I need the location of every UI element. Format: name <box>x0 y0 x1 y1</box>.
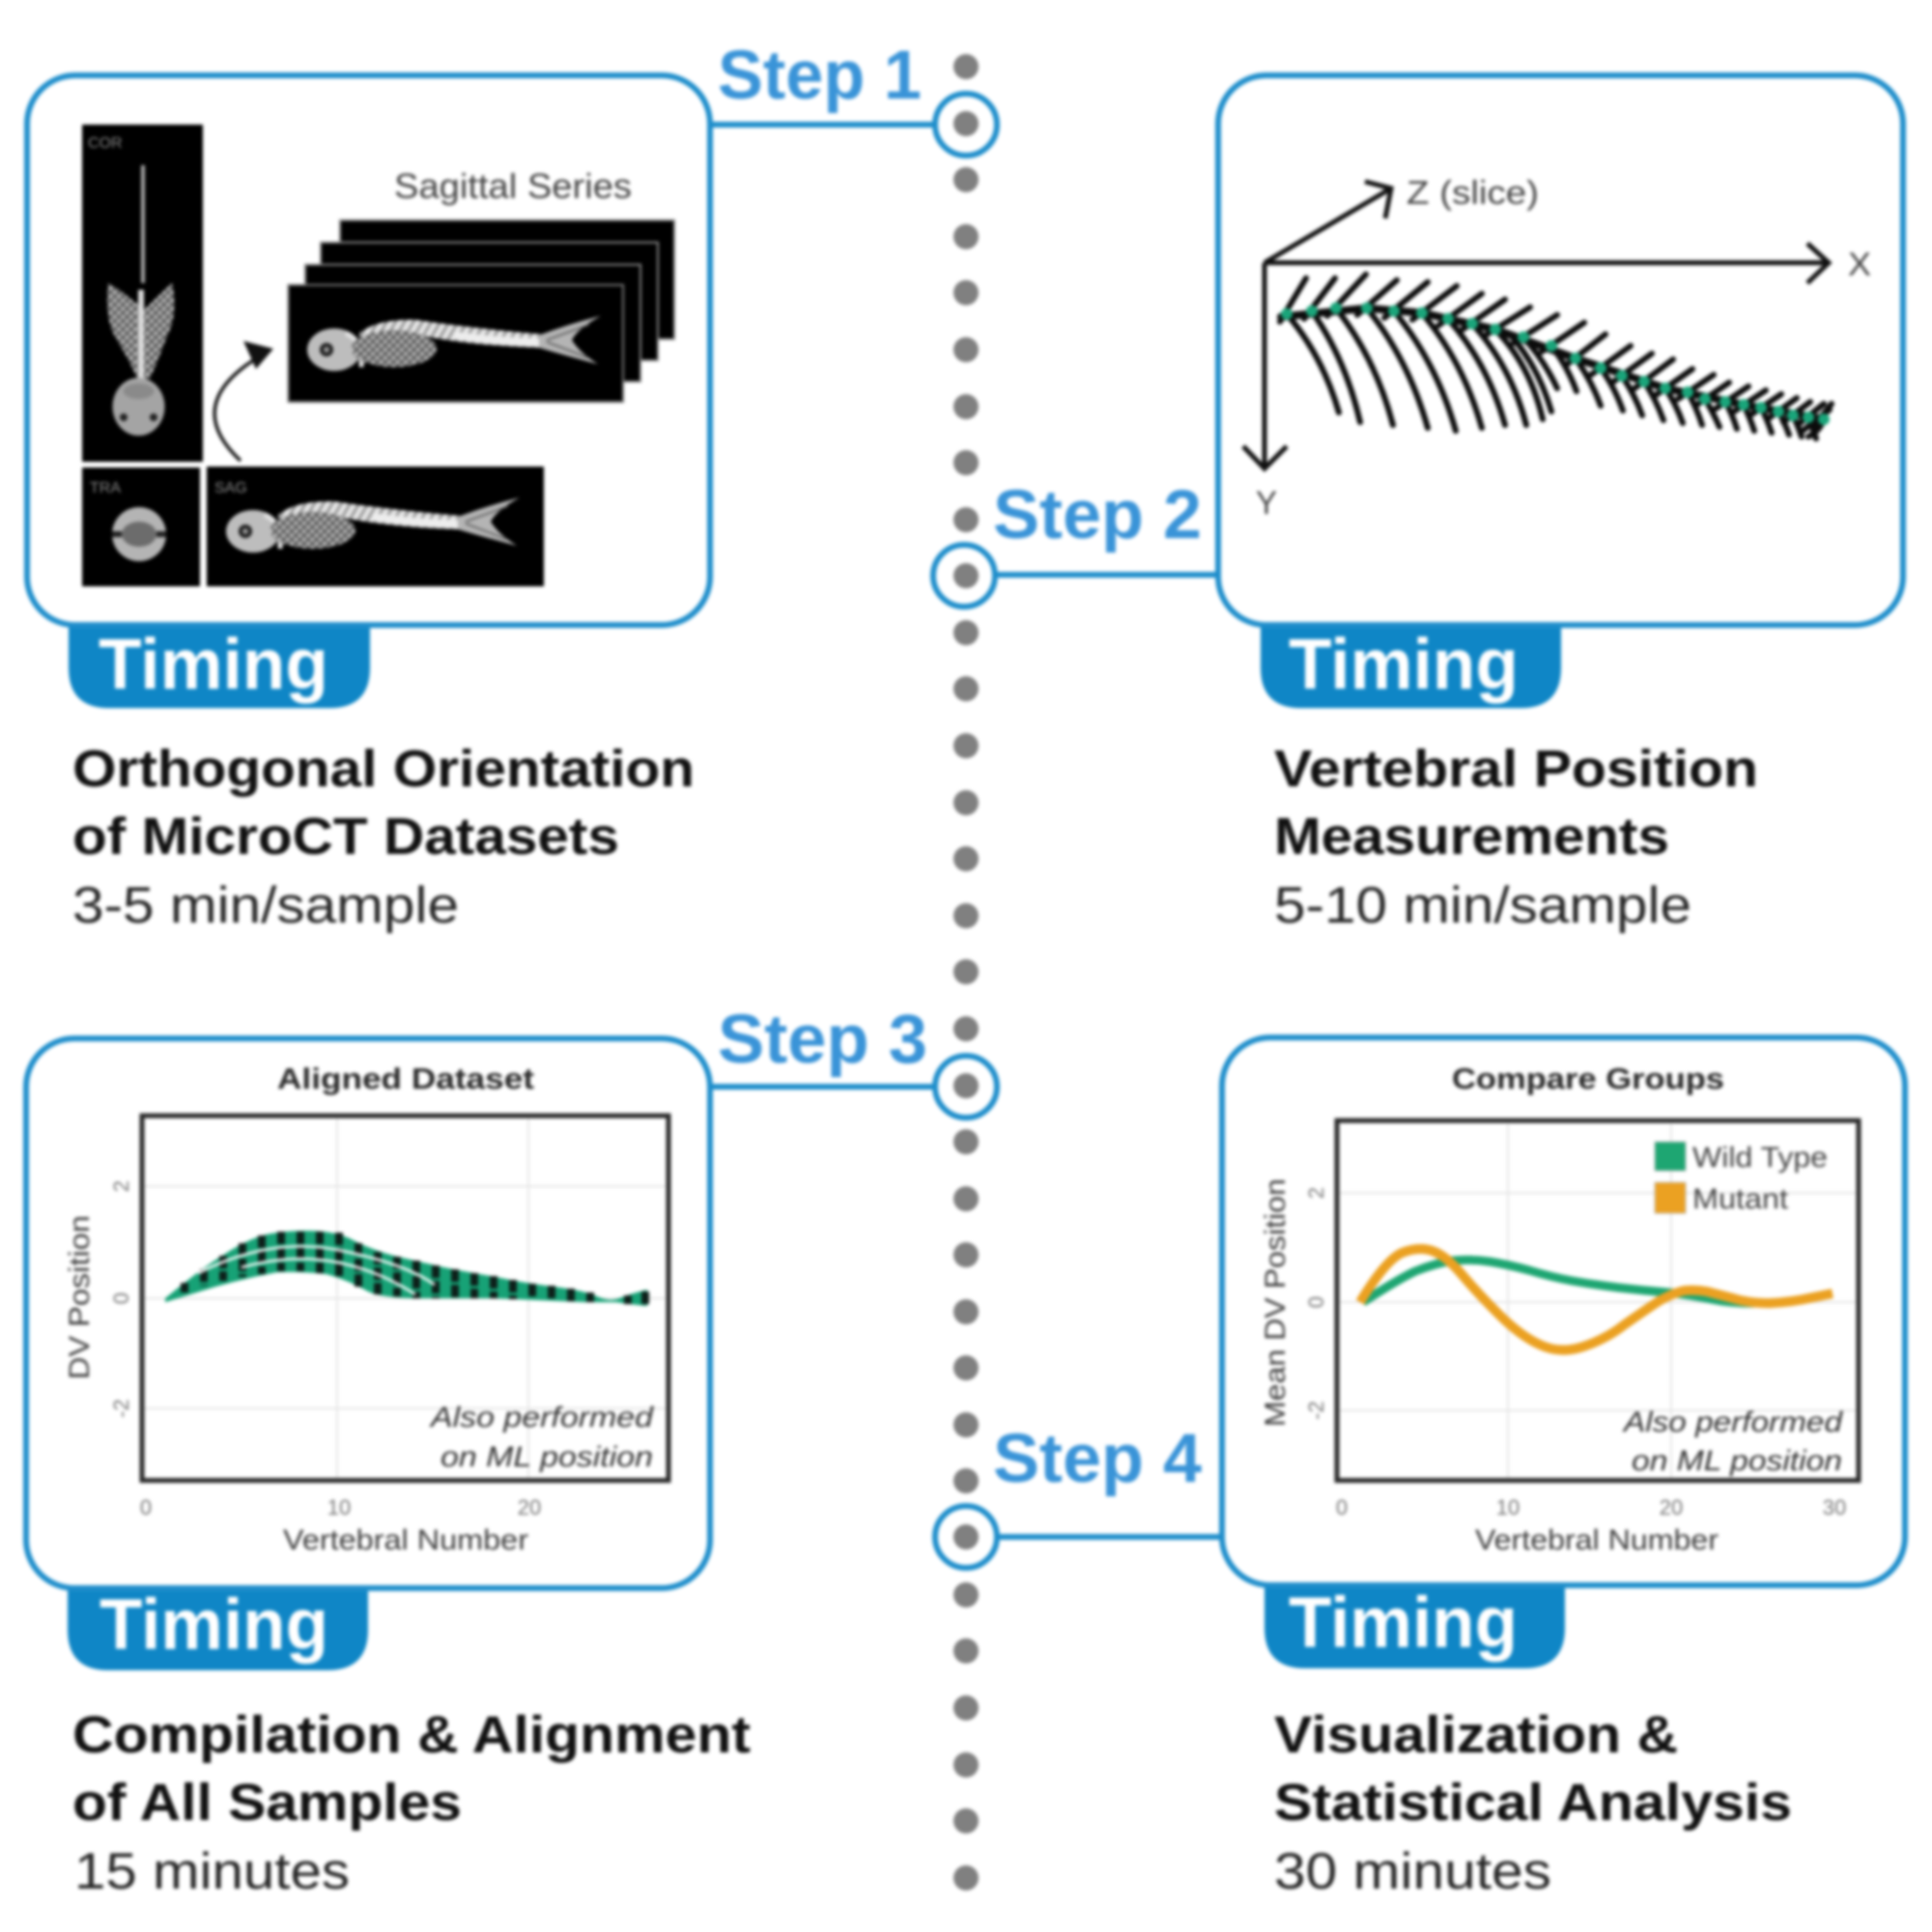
panel: step 1 orthogonal orientation <box>27 75 710 708</box>
axis ticks: 0 <box>1304 1296 1328 1308</box>
timing tab <box>1261 618 1561 708</box>
axis ticks <box>109 1180 541 1520</box>
sagittal image stack <box>288 220 674 402</box>
step 4 connector and ring <box>935 1506 1222 1568</box>
line chart: aligned dataset: DV Position <box>64 1215 96 1379</box>
timing tab: Timing <box>99 1584 328 1664</box>
axis ticks: 0 <box>1336 1495 1348 1520</box>
dotted timeline <box>953 54 979 1890</box>
timing tab: Timing <box>1289 624 1519 704</box>
wild type series <box>1363 1260 1754 1303</box>
step 1 label: Step 1 <box>718 38 922 114</box>
caption: step 3 <box>72 1706 751 1900</box>
sagittal series label: Sagittal Series <box>394 166 632 206</box>
panel: step 4 compare groups <box>1222 1037 1905 1668</box>
axis ticks: -2 <box>1304 1401 1328 1420</box>
axis ticks: 0 <box>140 1495 152 1520</box>
step 1 connector and ring <box>712 94 997 156</box>
caption: step 2: Vertebral Position <box>1274 740 1758 798</box>
axis titles: Vertebral Number <box>1475 1524 1719 1556</box>
axis ticks: 0 <box>109 1293 133 1304</box>
transverse view <box>82 468 200 586</box>
timing tab: Timing <box>1289 1582 1518 1662</box>
axis titles: Vertebral Number <box>283 1524 528 1556</box>
axis ticks: -2 <box>109 1399 133 1418</box>
caption: step 3: of All Samples <box>72 1774 462 1832</box>
note: Also performed <box>429 1402 654 1434</box>
caption: step 2: 5-10 min/sample <box>1274 877 1691 934</box>
legend: Wild Type <box>1692 1142 1828 1174</box>
axis ticks: 10 <box>1496 1495 1520 1520</box>
caption: step 2 <box>1274 740 1758 934</box>
caption: step 1 <box>72 740 695 934</box>
caption: step 1: 3-5 min/sample <box>72 877 459 934</box>
axis ticks: 30 <box>1823 1495 1846 1520</box>
panel: step 3 aligned dataset <box>26 1038 710 1670</box>
note: Also performed <box>1622 1406 1843 1438</box>
timing tab <box>68 1580 368 1670</box>
white series lines <box>198 1246 435 1294</box>
caption: step 3: Compilation & Alignment <box>72 1706 751 1764</box>
timing tab <box>1264 1578 1565 1668</box>
step 2 connector and ring <box>933 545 1218 607</box>
panel frame <box>26 1038 710 1588</box>
step 4 label: Step 4 <box>993 1421 1203 1497</box>
axis ticks: 20 <box>518 1495 541 1520</box>
line chart: aligned dataset <box>64 1116 668 1556</box>
axis ticks: 2 <box>1304 1187 1328 1199</box>
timing tab: Timing <box>99 624 328 704</box>
axis ticks: 2 <box>109 1180 133 1192</box>
step 3 connector and ring <box>710 1056 997 1118</box>
coronal view: COR <box>88 135 123 152</box>
caption: step 2: Measurements <box>1274 808 1669 866</box>
panel frame <box>27 75 710 625</box>
vertebral column <box>1280 274 1832 439</box>
timing tab <box>69 618 370 708</box>
data band <box>165 1231 647 1306</box>
sagittal view <box>207 467 544 586</box>
vertebra ticks <box>185 1232 645 1306</box>
transverse view: TRA <box>90 480 121 497</box>
line chart: compare groups <box>1260 1121 1859 1556</box>
caption: step 4 <box>1274 1706 1792 1900</box>
caption: step 4: 30 minutes <box>1274 1843 1551 1900</box>
chart title: Compare Groups <box>1452 1062 1724 1095</box>
mutant series <box>1360 1249 1833 1350</box>
legend: Mutant <box>1692 1183 1789 1215</box>
coronal view <box>82 125 203 462</box>
curved arrow <box>214 341 273 461</box>
panel frame <box>1222 1037 1905 1585</box>
line chart: compare groups: on ML position <box>1632 1445 1842 1477</box>
axis ticks <box>1304 1187 1846 1520</box>
chart title: Aligned Dataset <box>277 1062 534 1095</box>
axes: X <box>1848 246 1871 283</box>
axes: Z (slice) <box>1406 175 1539 212</box>
axes <box>1243 175 1871 522</box>
line chart: aligned dataset: on ML position <box>440 1441 653 1473</box>
axis ticks: 10 <box>327 1495 351 1520</box>
panel: step 2 vertebral position <box>1218 75 1903 708</box>
panel frame <box>1218 75 1903 625</box>
vertebra markers <box>1281 302 1830 425</box>
step 2 label: Step 2 <box>993 477 1202 554</box>
sagittal view: SAG <box>214 480 247 497</box>
axis ticks: 20 <box>1660 1495 1683 1520</box>
caption: step 4: Statistical Analysis <box>1274 1774 1792 1832</box>
step 3 label: Step 3 <box>718 1002 927 1078</box>
caption: step 4: Visualization & <box>1274 1706 1678 1764</box>
legend <box>1655 1142 1828 1215</box>
caption: step 3: 15 minutes <box>74 1843 350 1900</box>
line chart: compare groups: Mean DV Position <box>1260 1179 1292 1427</box>
axes: Y <box>1256 485 1277 522</box>
caption: step 1: of MicroCT Datasets <box>72 808 619 866</box>
caption: step 1: Orthogonal Orientation <box>72 740 695 798</box>
